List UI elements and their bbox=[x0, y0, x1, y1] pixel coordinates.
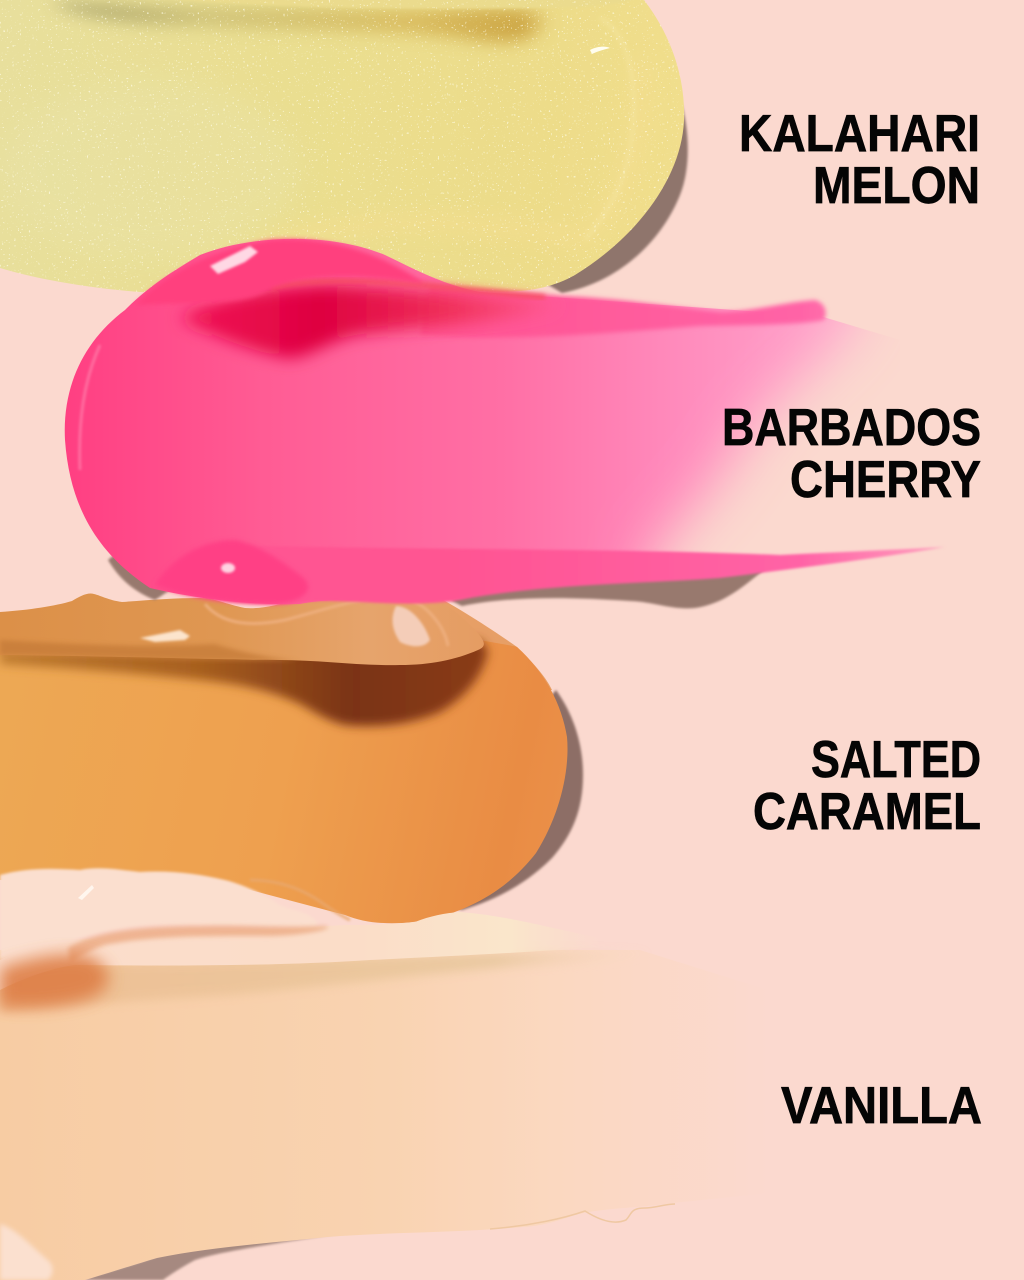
caramel lower ridge near vanilla bbox=[250, 880, 350, 920]
vanilla tan streak bbox=[0, 952, 651, 1012]
melon pale centre bbox=[0, 80, 300, 260]
melon top lip bbox=[130, 0, 640, 9]
swatch: kalahari melon bbox=[0, 0, 700, 300]
label line: Salted: SALTED bbox=[811, 731, 981, 789]
caramel body bbox=[0, 640, 568, 923]
label: Kalahari Melon bbox=[739, 105, 980, 215]
cherry orange ridge bbox=[270, 281, 545, 297]
caramel fold ridge highlight bbox=[205, 597, 448, 646]
melon top shadow band bbox=[50, 2, 550, 42]
melon gloss bbox=[590, 47, 610, 54]
swatch: salted caramel bbox=[0, 583, 583, 923]
label line: Melon: MELON bbox=[813, 157, 980, 215]
swatch: vanilla cream lump bbox=[0, 868, 640, 1007]
label line: Kalahari: KALAHARI bbox=[739, 105, 980, 163]
melon warm lower rim bbox=[260, 60, 642, 250]
cream gloss bbox=[78, 885, 94, 900]
swatch: vanilla bbox=[0, 950, 800, 1280]
caramel rim under the fold bbox=[300, 588, 552, 700]
vanilla body bbox=[0, 950, 800, 1280]
caramel gloss patch bbox=[393, 606, 430, 646]
label line: Barbados: BARBADOS bbox=[722, 399, 981, 457]
caramel small glints bbox=[140, 630, 190, 642]
cherry left rim highlight bbox=[80, 345, 100, 470]
caramel cast shadow bbox=[420, 690, 583, 910]
cherry bottom gloss bbox=[221, 563, 235, 573]
cherry cast shadows bbox=[108, 550, 770, 608]
melon glitter bbox=[0, 0, 700, 300]
label line: Caramel: CARAMEL bbox=[753, 783, 981, 841]
cherry deep red fold bbox=[180, 285, 560, 358]
melon inner pool edge bbox=[585, 18, 634, 240]
cherry bottom wisp bbox=[160, 545, 945, 604]
caramel fold crease shadow bbox=[0, 640, 300, 661]
cherry top ragged edge bbox=[420, 285, 826, 337]
cream lump top bbox=[0, 868, 317, 960]
melon body bbox=[0, 0, 684, 292]
caramel top fold bbox=[0, 583, 484, 665]
cream inner orange crease bbox=[68, 926, 328, 962]
melon cast shadow bbox=[540, 105, 688, 293]
cherry body bbox=[65, 239, 900, 604]
label line: Cherry: CHERRY bbox=[790, 451, 981, 509]
cherry bottom glob bbox=[155, 540, 308, 604]
vanilla bottom ragged trail bbox=[490, 1204, 675, 1229]
label: Vanilla: VANILLA bbox=[781, 1077, 982, 1135]
cherry gloss highlights bbox=[210, 246, 258, 274]
label: Barbados Cherry bbox=[722, 399, 981, 509]
label: Salted Caramel bbox=[753, 731, 981, 841]
swatch: barbados cherry bbox=[65, 239, 945, 608]
vanilla cast shadow bbox=[80, 1232, 345, 1280]
cream lump lower strip bbox=[0, 912, 640, 990]
vanilla bottom left glob bbox=[0, 1224, 53, 1280]
cherry top glob bbox=[135, 239, 425, 305]
caramel fold shadow bbox=[0, 640, 488, 726]
vanilla orange smear bbox=[0, 954, 108, 1007]
